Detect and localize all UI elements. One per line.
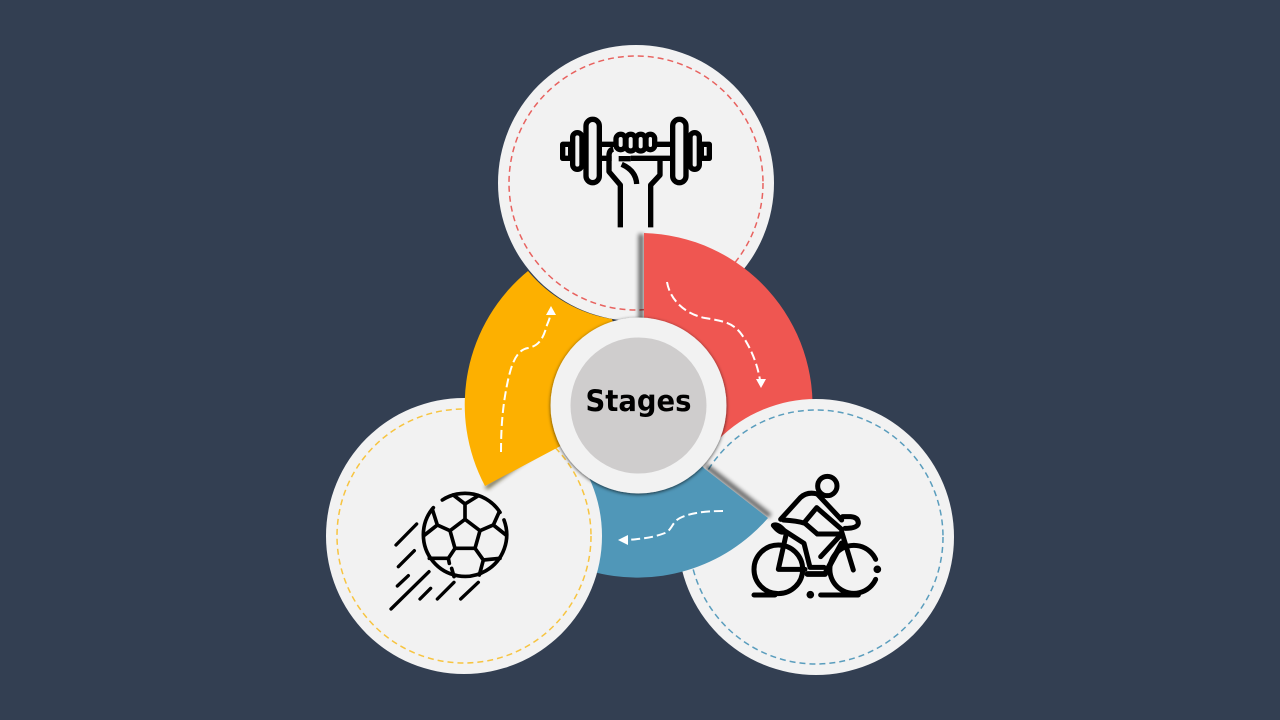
icon: soccer ball xyxy=(391,493,507,609)
shadow: red sector edge xyxy=(638,234,644,322)
arrow: red sector xyxy=(667,282,766,388)
center hub xyxy=(550,318,726,494)
shadow: yellow sector edge xyxy=(486,439,553,488)
icon: dumbbell and fist xyxy=(563,119,709,227)
panel: yellow sector xyxy=(465,271,638,486)
panel: red sector xyxy=(638,233,813,470)
heading: Stages: Stages xyxy=(586,384,692,418)
panel: left circle xyxy=(326,398,602,674)
arrow: yellow sector xyxy=(501,306,556,452)
shadow: blue sector edge xyxy=(706,466,770,516)
icon: cyclist xyxy=(754,476,879,596)
panel: right circle xyxy=(678,399,954,675)
arrow: blue sector xyxy=(618,511,723,545)
panel: top circle xyxy=(498,45,774,321)
panel: blue sector xyxy=(560,405,768,578)
